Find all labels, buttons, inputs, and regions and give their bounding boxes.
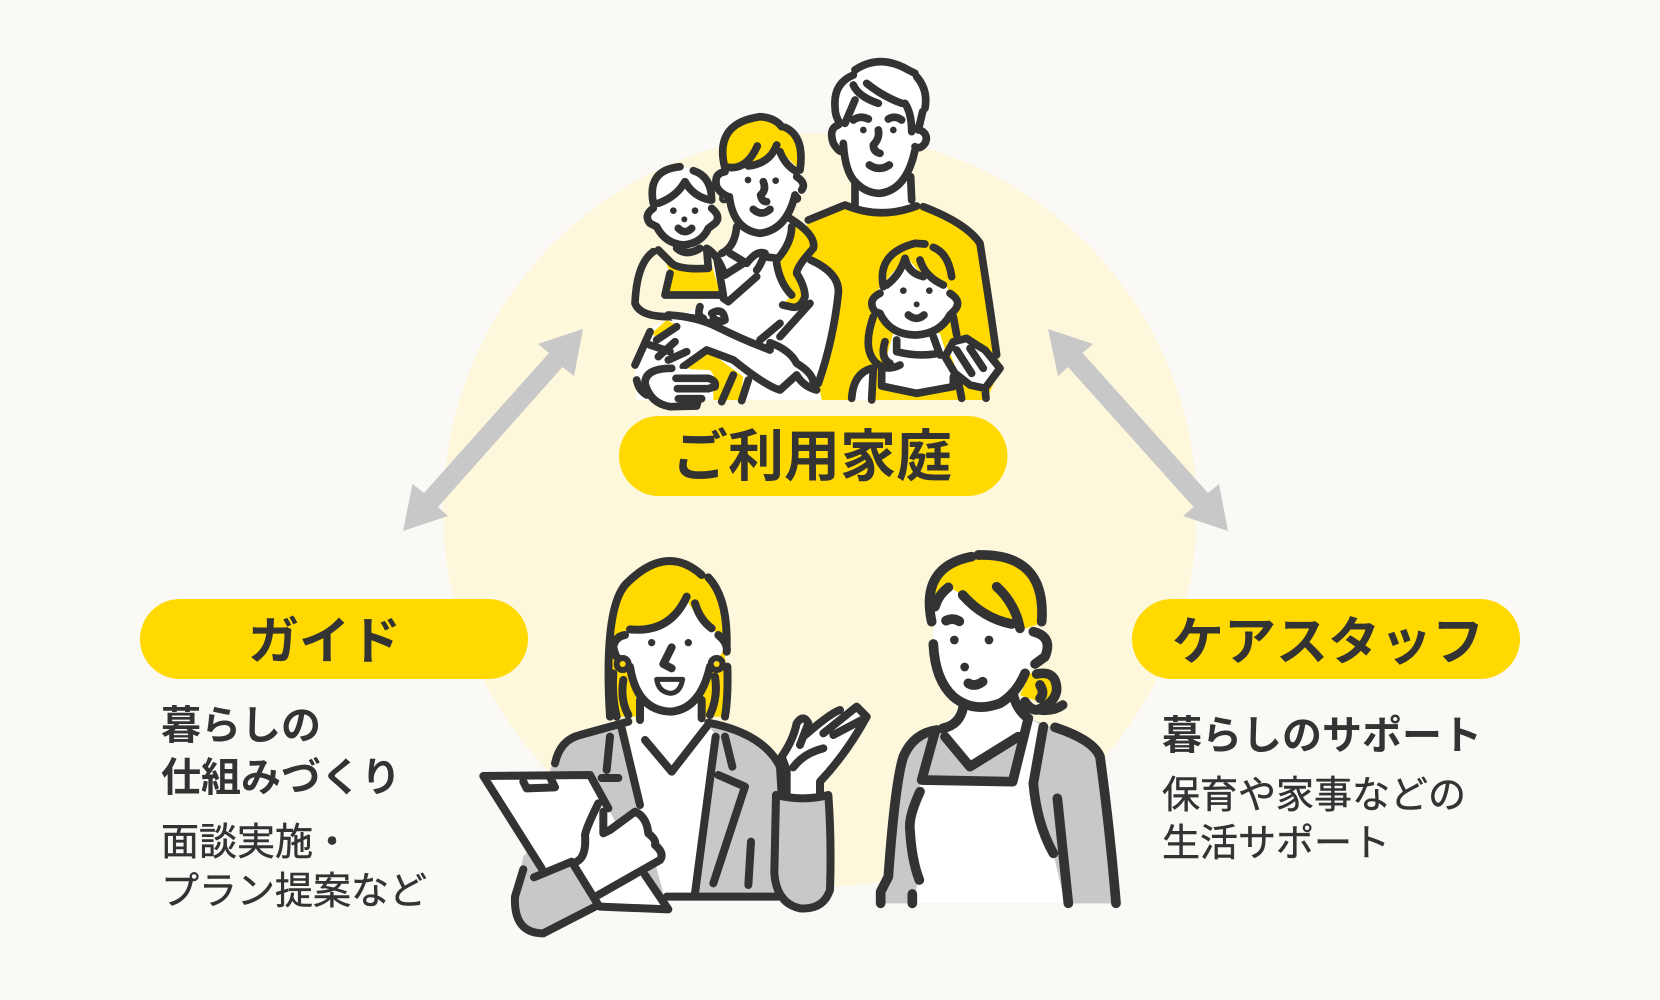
label pill: family: ご利用家庭 (672, 425, 952, 488)
illustration: family (635, 62, 1002, 407)
illustration: guide (483, 561, 867, 935)
text block: guide role: 暮らしの (161, 704, 321, 748)
text block: guide role: 面談実施・ (161, 822, 351, 864)
text block: care staff role: 保育や家事などの (1162, 775, 1466, 817)
text block: guide role: プラン提案など (161, 871, 427, 913)
text block: guide role: 仕組みづくり (161, 756, 401, 800)
label pill: guide: ガイド (248, 613, 401, 670)
label pill: care staff (1132, 599, 1520, 679)
arrow: family to guide (403, 329, 583, 531)
text block: care staff role (1162, 714, 1482, 865)
label pill: family (619, 416, 1008, 496)
text block: care staff role: 暮らしのサポート (1162, 714, 1482, 758)
illustration: care staff (878, 555, 1117, 903)
girl (867, 252, 958, 368)
label pill: guide (140, 599, 528, 679)
text block: guide role (161, 704, 427, 913)
arm (650, 315, 817, 390)
arrow: family to care staff (1048, 329, 1228, 531)
label pill: care staff: ケアスタッフ (1172, 614, 1484, 672)
text block: care staff role: 生活サポート (1162, 823, 1390, 865)
background circle (443, 133, 1197, 887)
child (662, 250, 722, 297)
